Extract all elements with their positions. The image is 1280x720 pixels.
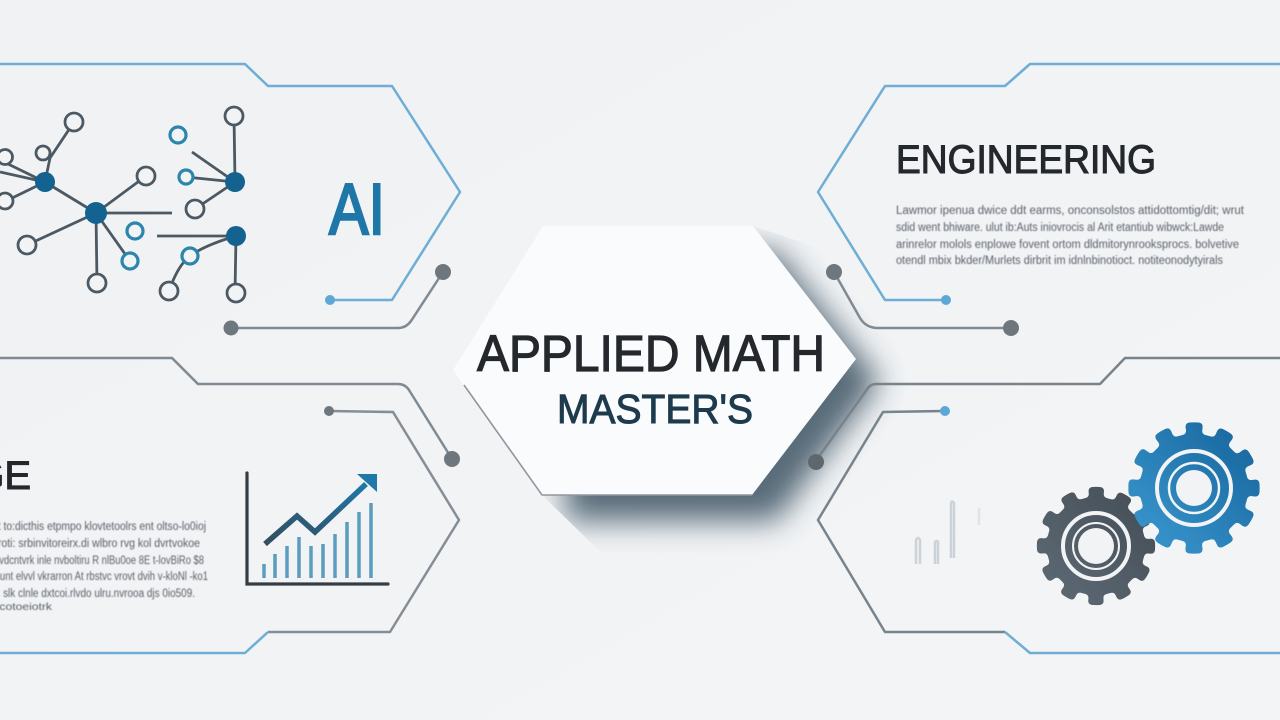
panel: AI [0, 64, 460, 336]
Engineering body text: sdid went bhiware. ulut ib:Auts iniovrocis al Arit etantiub wibwck:Lawde [896, 222, 1224, 234]
Engineering body text: arinrelor molols enplowe fovent ortom dldmitorynrooksprocs. bolvetive [896, 239, 1239, 251]
Engineering connector blue dot [941, 295, 951, 305]
subtitle: Master's: MASTER'S [557, 386, 753, 432]
central hexagon [453, 226, 856, 495]
Engineering body text [896, 205, 1245, 267]
AI grey connector [224, 264, 451, 336]
title: Applied Math: APPLIED MATH [477, 325, 825, 382]
Engineering body text: Lawmor ipenua dwice ddt earms, onconsolstos attidottomtig/dit; wrut [896, 205, 1245, 217]
icon: grey gear [1044, 494, 1148, 598]
icon: blue gear [1136, 430, 1252, 546]
Finance outer connector [0, 358, 460, 467]
heading: Engineering: ENGINEERING [896, 138, 1156, 182]
Engineering body text: otendl mbix bkder/Murlets dirbrit im idnlnbinotioct. notiteonodytyirals [896, 255, 1223, 267]
icon: neural network [0, 107, 246, 302]
Finance body text [0, 521, 208, 613]
hexagon face [453, 226, 856, 495]
Engineering panel blue outline [818, 64, 1280, 300]
chart bars [264, 503, 371, 578]
Finance panel outline [0, 411, 459, 653]
faint ghost bars [916, 502, 979, 564]
icon: growth chart [247, 473, 388, 584]
heading: AI: AI [329, 170, 385, 250]
Gears connector dots [808, 406, 950, 470]
chart trend arrow [265, 474, 377, 544]
AI panel blue outline [0, 64, 460, 300]
AI connector blue dot [325, 295, 335, 305]
panel: Engineering gears [808, 358, 1280, 653]
hexagon lower-left edge [464, 385, 752, 495]
Gears panel outline [815, 358, 1280, 653]
chart axes [247, 473, 388, 584]
panel: Engineering [818, 64, 1280, 336]
panel: Finance [0, 358, 460, 653]
Engineering grey connector [826, 264, 1044, 336]
hexagon cast shadow [565, 250, 880, 521]
